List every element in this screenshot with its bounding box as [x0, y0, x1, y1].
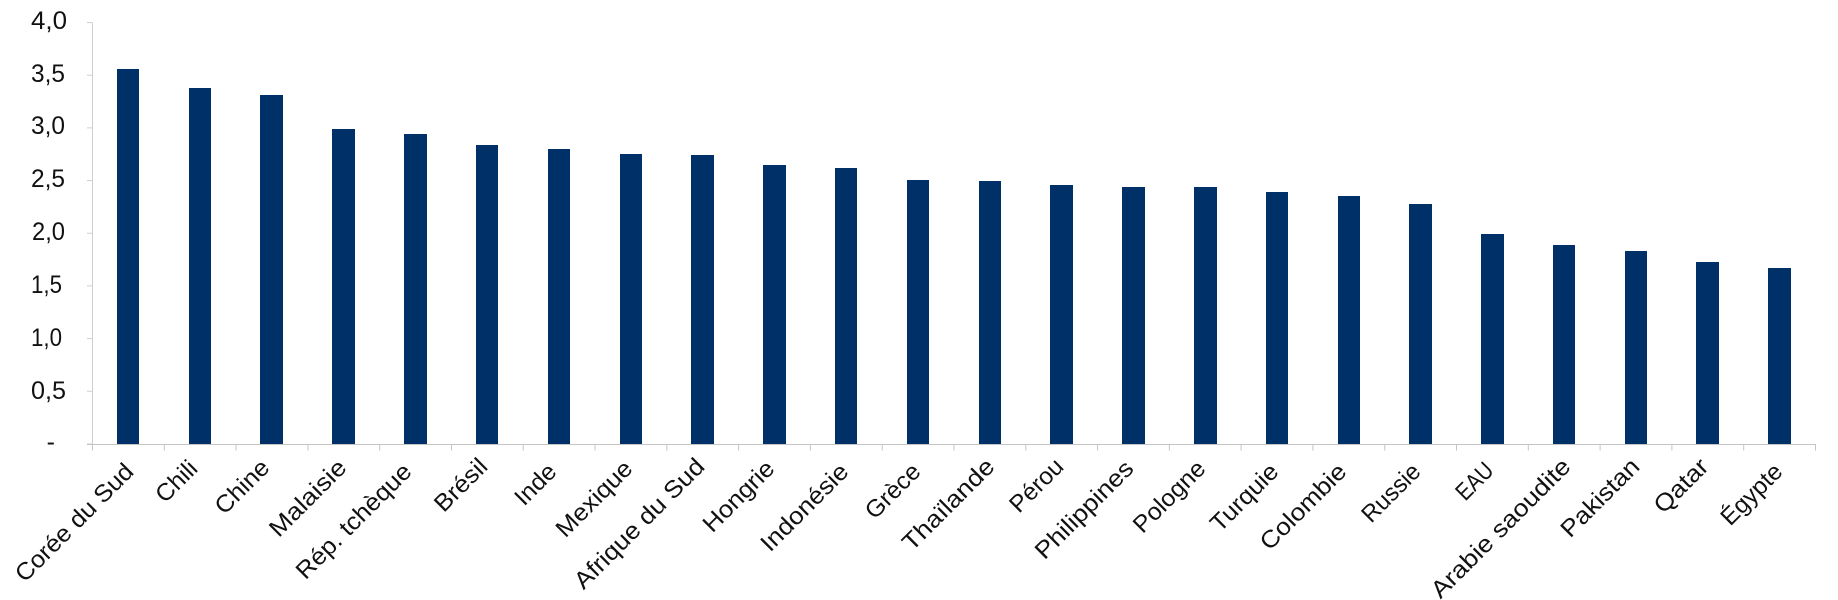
x axis labels: Chine — [209, 454, 275, 520]
bars — [117, 69, 1791, 444]
y axis labels: 2,0 — [32, 218, 65, 246]
y axis labels: - — [47, 428, 55, 456]
x axis labels: Pérou — [1004, 453, 1069, 518]
y axis labels — [31, 7, 67, 456]
x axis labels: Arabie saoudite — [1426, 453, 1576, 600]
x axis labels: Brésil — [429, 453, 493, 517]
x axis labels: Indonésie — [755, 458, 854, 557]
x axis labels: Chili — [150, 455, 203, 508]
x axis labels: Qatar — [1648, 453, 1714, 519]
x axis labels: Corée du Sud — [10, 458, 139, 588]
x axis labels: Pakistan — [1555, 453, 1645, 543]
y axis labels: 4,0 — [31, 7, 67, 35]
x axis labels — [10, 453, 1788, 600]
y axis labels: 3,0 — [31, 112, 65, 140]
x axis — [87, 444, 1816, 450]
x axis labels: EAU — [1450, 457, 1499, 506]
x axis labels: Pologne — [1128, 455, 1211, 539]
x axis labels: Russie — [1356, 458, 1426, 528]
x axis labels: Grèce — [860, 458, 926, 525]
x axis labels: Colombie — [1255, 458, 1352, 556]
x axis labels: Philippines — [1030, 455, 1139, 565]
y axis labels: 0,5 — [31, 377, 66, 405]
x axis labels: Égypte — [1715, 458, 1788, 531]
x axis labels: Malaisie — [264, 454, 352, 543]
y axis labels: 3,5 — [31, 60, 65, 88]
x axis labels: Rép. tchèque — [291, 458, 417, 585]
x axis labels: Hongrie — [698, 455, 780, 538]
x axis labels: Inde — [509, 458, 562, 511]
x axis labels: Turquie — [1205, 458, 1284, 537]
x axis labels: Mexique — [551, 455, 638, 543]
y axis labels: 1,0 — [31, 324, 62, 352]
y axis — [87, 22, 92, 444]
y axis labels: 1,5 — [31, 271, 62, 299]
x axis labels: Thaïlande — [897, 453, 1000, 556]
y axis labels: 2,5 — [31, 165, 65, 193]
x axis labels: Afrique du Sud — [569, 453, 710, 595]
